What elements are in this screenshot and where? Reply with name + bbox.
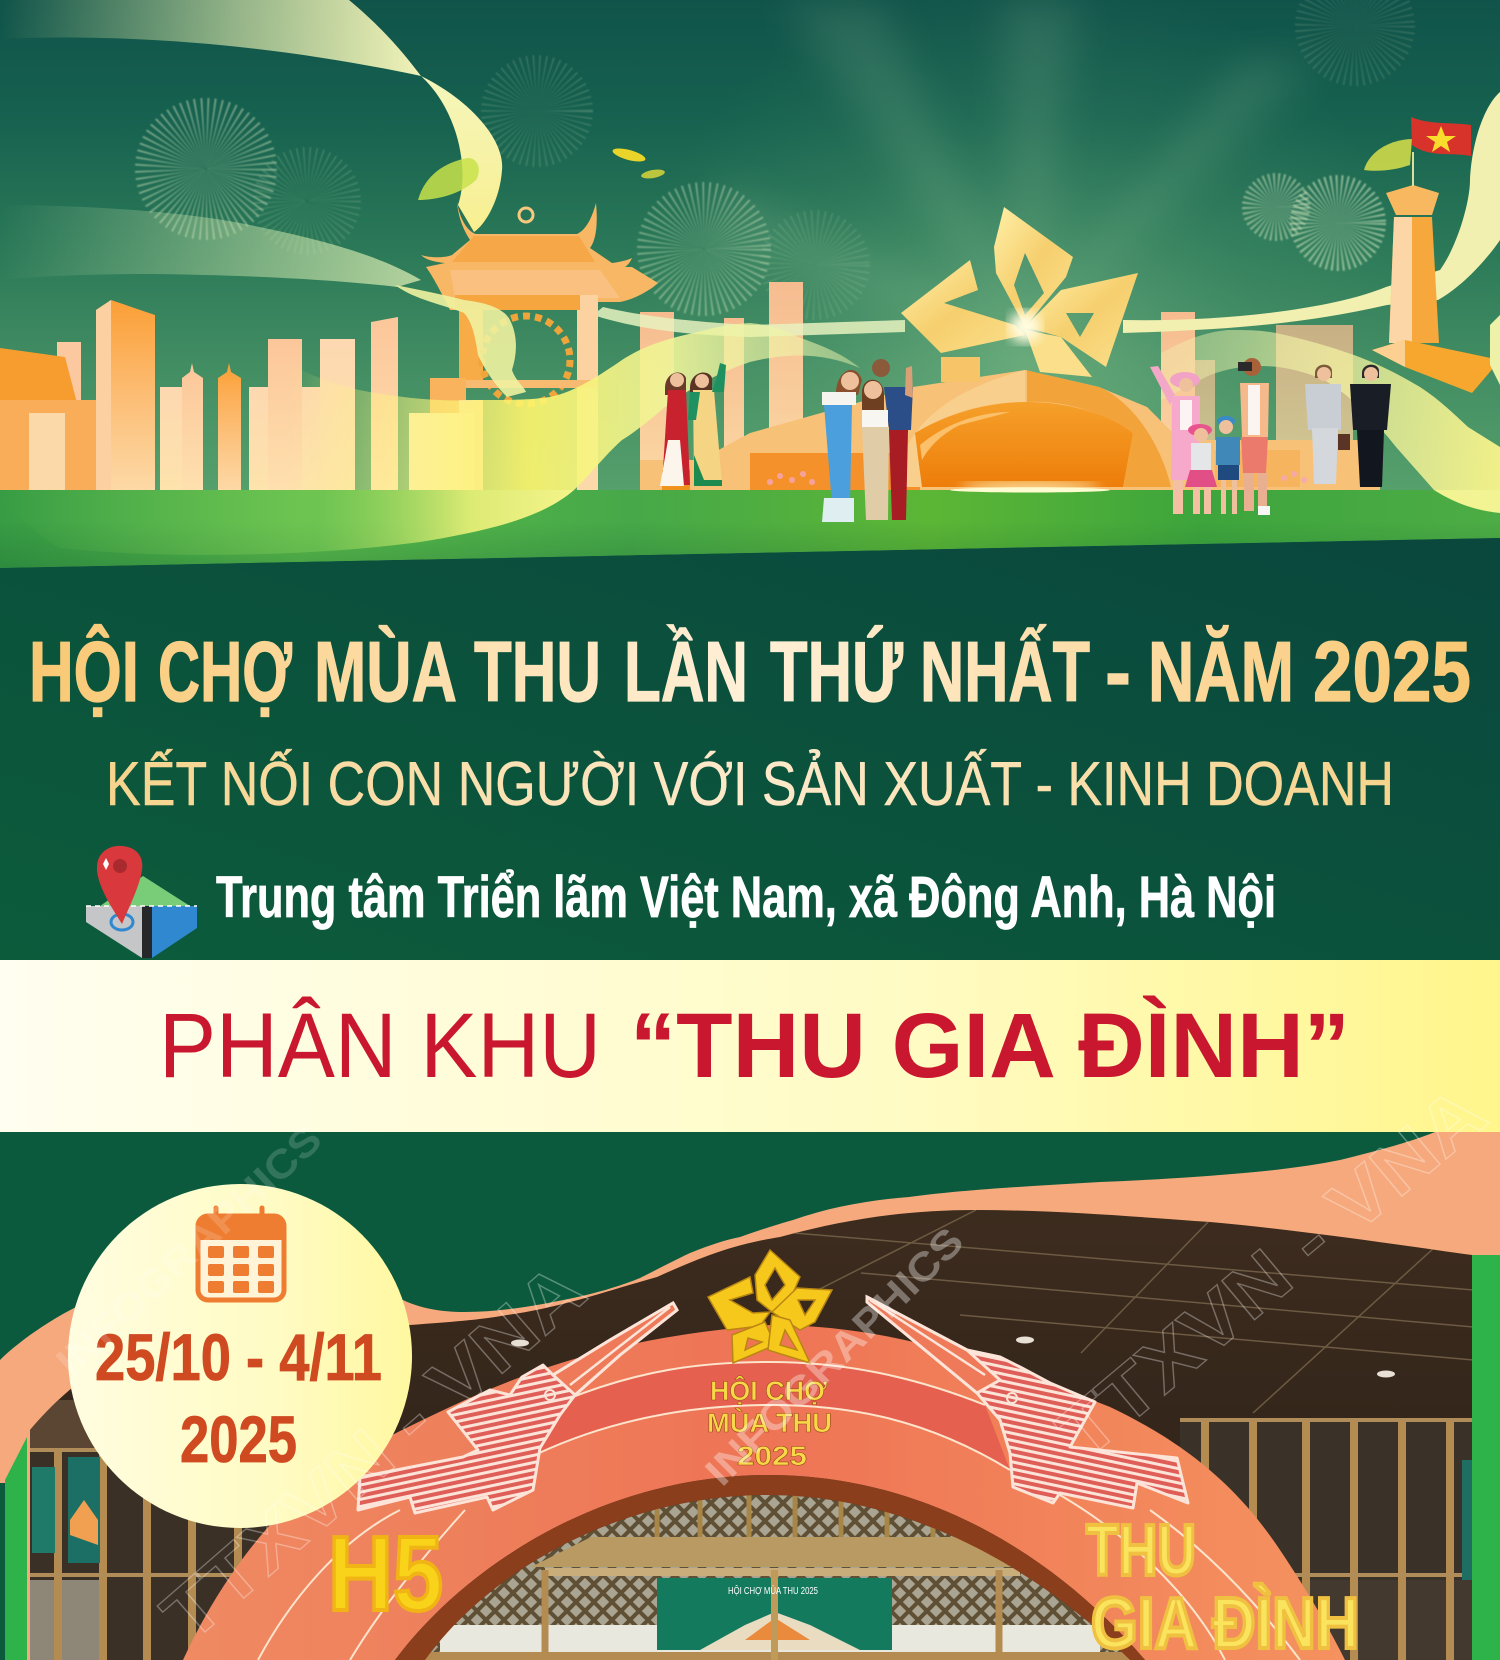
wave ribbon right xyxy=(1161,330,1500,490)
main title: 2025 xyxy=(1313,625,1471,720)
main title: - xyxy=(1105,625,1131,720)
middle arch band xyxy=(537,1362,1010,1470)
translucent ribbon mid left xyxy=(0,205,421,287)
main title: NHẤT xyxy=(920,624,1090,720)
main title: THU xyxy=(474,625,601,720)
star flower monument xyxy=(901,207,1138,382)
arch label THU: THU xyxy=(1086,1511,1196,1591)
light rays xyxy=(720,0,1297,290)
main title panel xyxy=(0,538,1500,960)
bird motif left xyxy=(358,1303,677,1513)
ribbon falling behind pagoda xyxy=(421,76,502,232)
glass screens xyxy=(32,1467,55,1553)
flower beds xyxy=(767,471,1307,485)
ribbon from pagoda xyxy=(395,285,526,397)
ground xyxy=(0,490,1500,568)
hero illustration xyxy=(0,0,1500,580)
watermark TTXVN xyxy=(146,1070,1500,1657)
inner arch rim xyxy=(395,1475,1145,1660)
arc band behind star xyxy=(593,92,1500,337)
lower panel background xyxy=(0,1132,1500,1660)
people: businessmen xyxy=(1305,365,1391,487)
flag xyxy=(1411,117,1471,156)
photo: fair entrance arch xyxy=(30,1200,1474,1660)
main title: NĂM xyxy=(1148,625,1294,720)
ceiling lights xyxy=(511,1336,1395,1378)
arch logo text: 2025 xyxy=(737,1441,807,1471)
arch label H5: H5 xyxy=(328,1515,443,1633)
view through arch xyxy=(425,1495,1130,1660)
vertical golden columns xyxy=(58,1420,1450,1660)
people: family xyxy=(1150,358,1270,515)
side strip right xyxy=(1472,1255,1500,1660)
flagpole tower xyxy=(1372,117,1500,393)
side strip left xyxy=(5,1437,27,1660)
people: ao dai pair xyxy=(660,363,726,486)
arch lines xyxy=(258,1362,1300,1660)
arch logo text xyxy=(707,1375,832,1471)
icon: calendar xyxy=(198,1208,284,1300)
date text: 25/10 - 4/11 xyxy=(95,1320,382,1394)
arch logo text: HỘI CHỢ xyxy=(710,1375,827,1406)
centre hall xyxy=(640,370,1380,492)
arch star logo xyxy=(708,1250,832,1363)
ceiling panels xyxy=(794,1210,1474,1413)
wave ribbon left yellow xyxy=(287,323,860,490)
main title: THỨ xyxy=(770,625,903,720)
main title: CHỢ xyxy=(158,625,292,720)
watermark INFOGRAPHICS: INFOGRAPHICS xyxy=(697,1219,972,1494)
pagoda gate xyxy=(421,202,658,490)
ground ribbons xyxy=(80,490,574,555)
green banner through arch: HỘI CHỢ MÙA THU 2025 xyxy=(728,1584,818,1597)
ribbon top left xyxy=(0,0,421,76)
arch logo text: MÙA THU xyxy=(707,1407,832,1438)
watermark INFOGRAPHICS: INFOGRAPHICS xyxy=(48,1117,330,1385)
section banner xyxy=(0,960,1500,1132)
side strip dark left xyxy=(0,1483,5,1660)
bird motif right xyxy=(867,1297,1188,1508)
main title: LẦN xyxy=(624,624,748,720)
section heading: “THU GIA ĐÌNH” xyxy=(630,994,1350,1097)
date circle xyxy=(68,1184,412,1528)
year text: 2025 xyxy=(180,1402,297,1476)
watermark TTXVN: TTXVN - VNA xyxy=(1042,1070,1500,1474)
left soffit xyxy=(30,1400,330,1450)
watermark INFOGRAPHICS xyxy=(48,1117,972,1494)
section heading: PHÂN KHU xyxy=(159,995,601,1097)
fireworks xyxy=(170,0,1385,293)
people: selfie group xyxy=(822,359,913,522)
main title: HỘI xyxy=(29,624,139,720)
green banner through arch xyxy=(657,1570,892,1660)
leaves xyxy=(418,158,479,200)
main title: MÙA xyxy=(314,625,457,720)
watermark TTXVN: TTXVN - VNA xyxy=(146,1247,600,1657)
peach wave xyxy=(0,1132,1500,1660)
wall with glass xyxy=(30,1450,1472,1660)
skyline distant towers xyxy=(640,282,1353,460)
city buildings left xyxy=(0,300,474,490)
icon: map pin xyxy=(86,846,197,958)
outer arch xyxy=(183,1325,1345,1660)
